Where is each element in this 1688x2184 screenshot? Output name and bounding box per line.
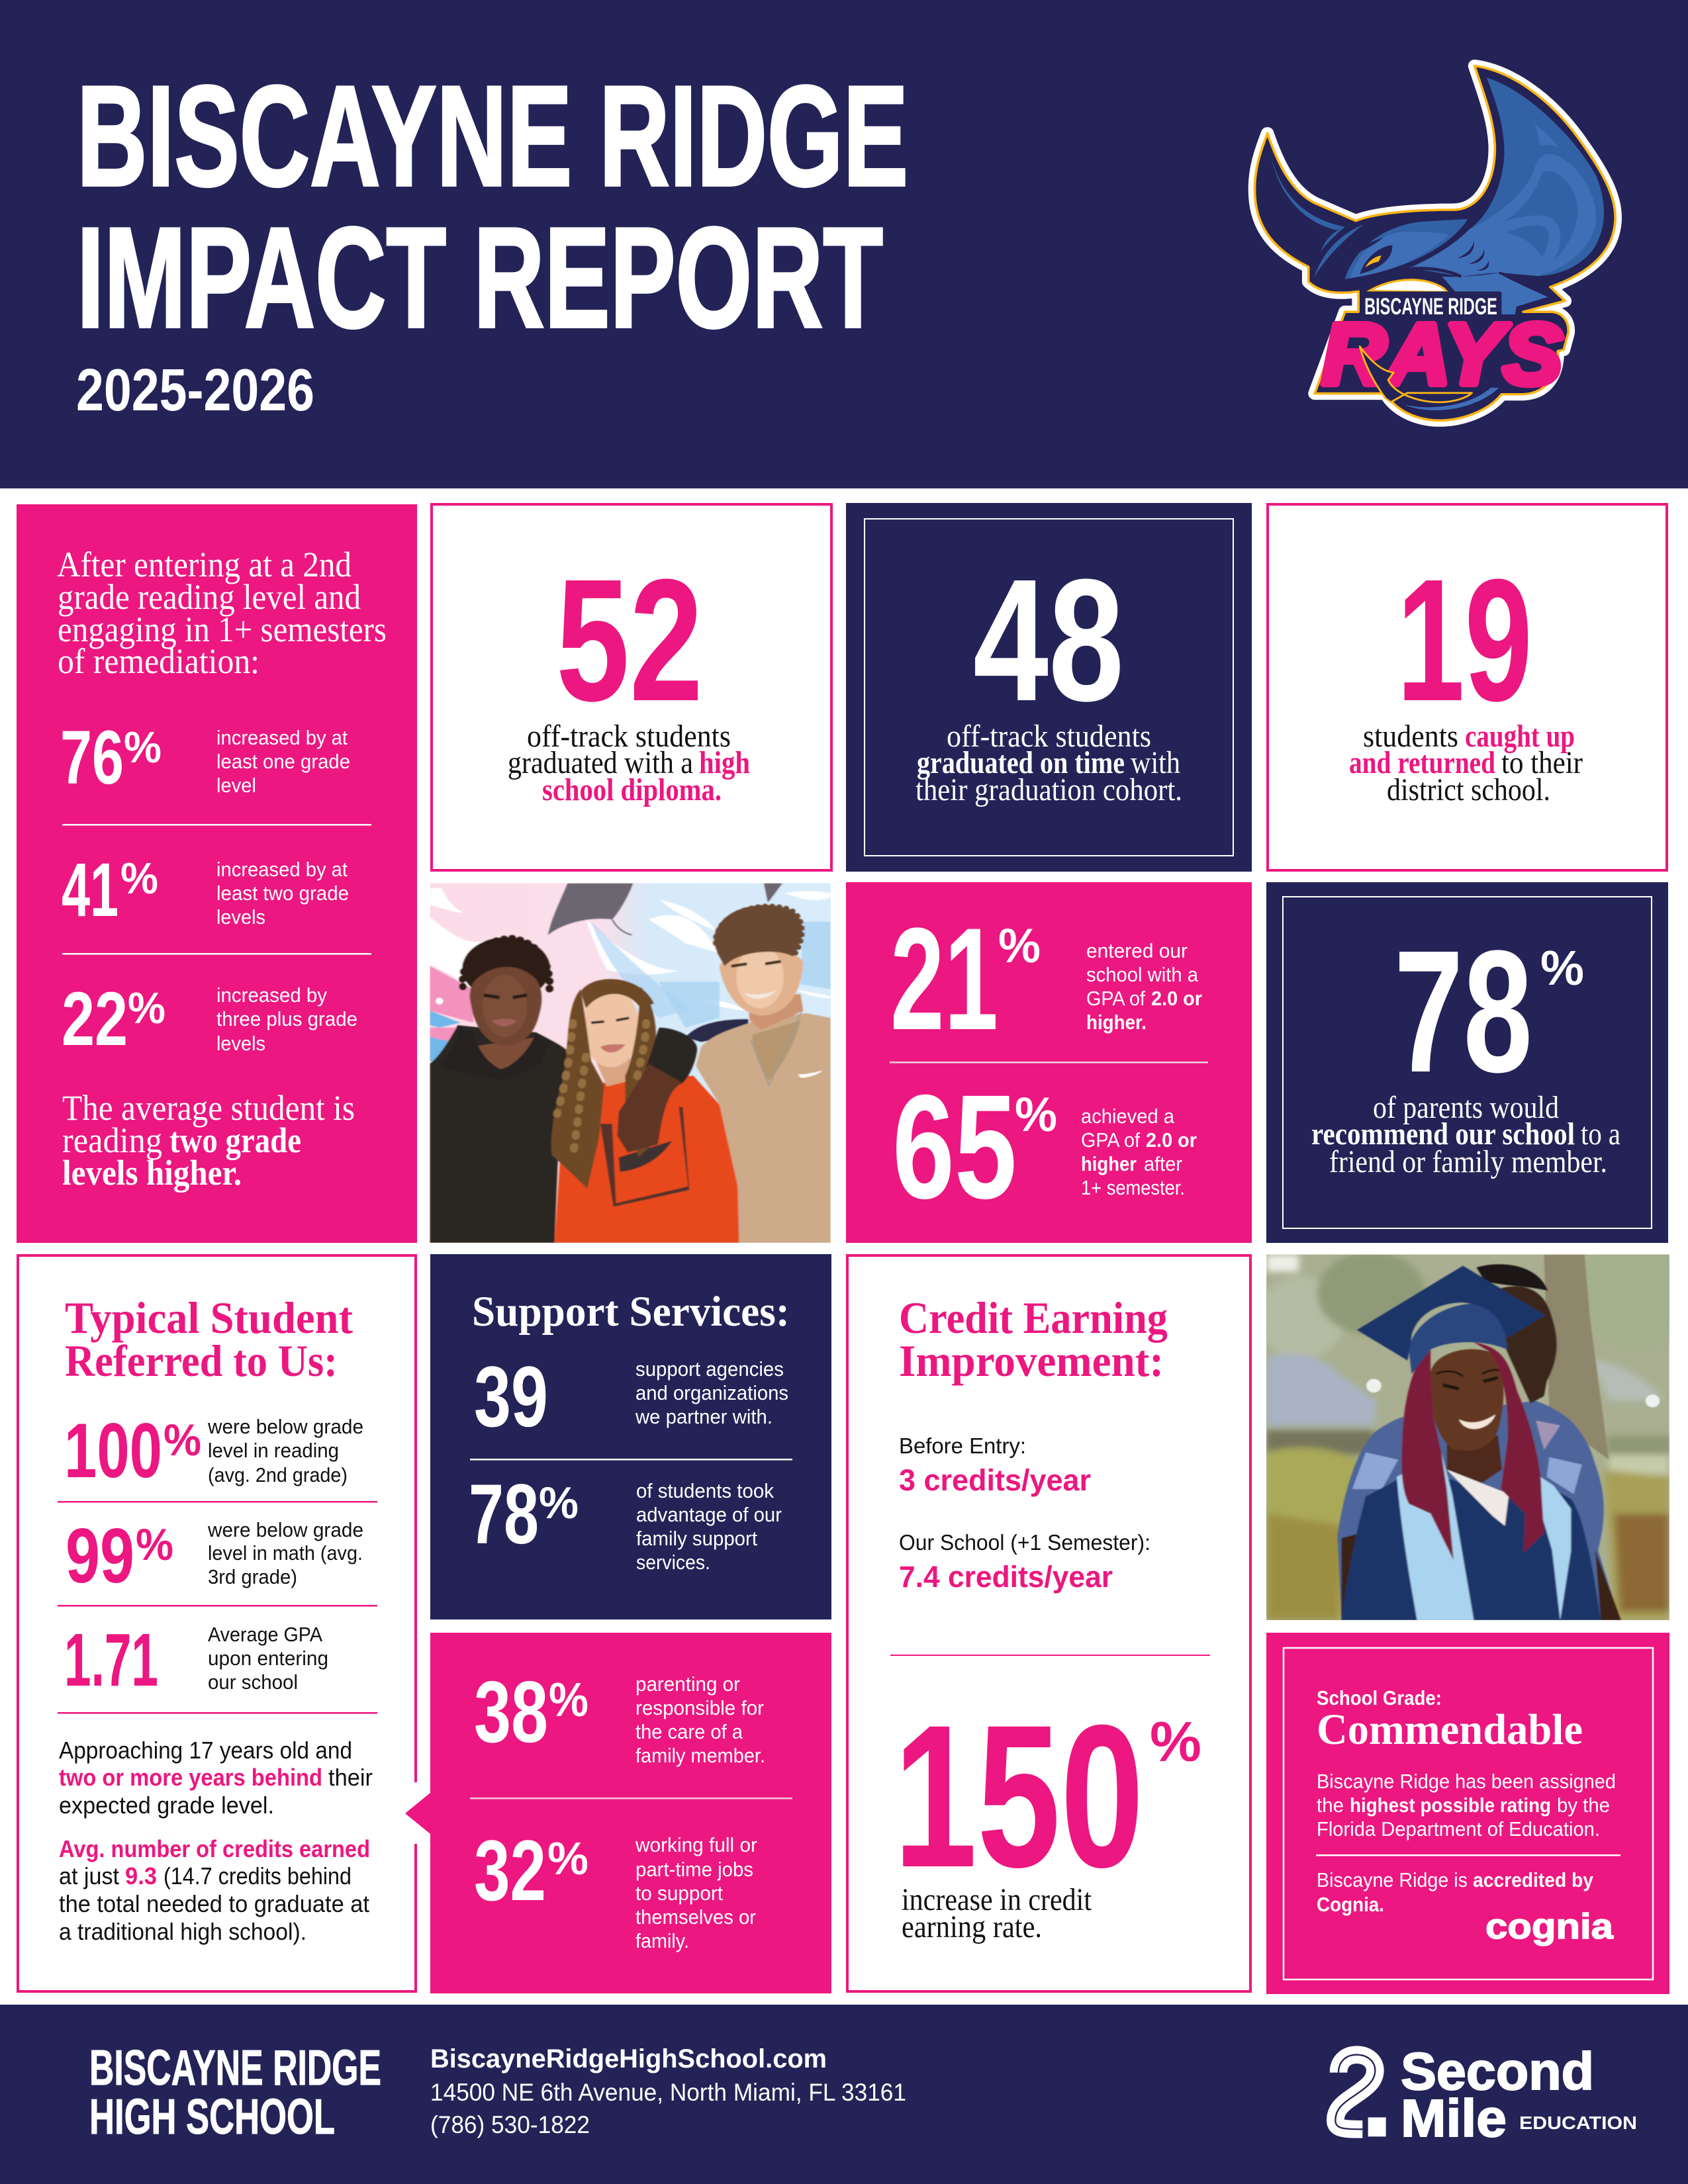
closing text xyxy=(62,1088,355,1193)
stat: 76% xyxy=(60,715,350,800)
school grade: Commendable xyxy=(1317,1706,1583,1754)
number 48: 48 xyxy=(973,543,1124,737)
caption: to a xyxy=(1581,1116,1620,1152)
caption: high xyxy=(699,745,750,780)
caption: graduated with a xyxy=(508,745,693,780)
heading: Referred to Us: xyxy=(65,1336,338,1386)
stat: 78% xyxy=(469,1467,782,1574)
panel: 19 returned xyxy=(1268,504,1667,870)
stat: 38%: the care of a xyxy=(635,1720,743,1743)
panel: school grade commendable xyxy=(1266,1633,1669,1994)
caption xyxy=(508,719,750,807)
stat: 32% xyxy=(474,1822,757,1952)
stat: 99% xyxy=(66,1512,363,1599)
logo: Biscayne Ridge Rays manta: RAYS xyxy=(1322,306,1562,402)
stat: 76%: 76 xyxy=(60,715,124,800)
logo: Second Mile Education: Mile xyxy=(1401,2089,1507,2148)
closing text: The average student is xyxy=(62,1088,355,1128)
girl: hoodie xyxy=(555,1075,739,1243)
stat: 38%: % xyxy=(549,1674,588,1727)
stat: 99%: % xyxy=(136,1520,173,1570)
text: age and grade: Approaching 17 years old and xyxy=(59,1737,352,1764)
boy left: hoodie xyxy=(430,1025,570,1243)
stat: 1.71 GPA: 1.71 xyxy=(64,1618,158,1702)
boy right: tan shirt xyxy=(696,1013,831,1243)
before entry: Before Entry: xyxy=(899,1433,1026,1458)
stat: 78%: family support xyxy=(636,1527,757,1550)
stat: 32%: themselves or xyxy=(635,1905,756,1929)
caption: and returned xyxy=(1349,745,1495,780)
text: age and grade: expected grade level. xyxy=(59,1792,274,1819)
stat: 150%: % xyxy=(1150,1711,1201,1774)
accreditation text: Biscayne Ridge is xyxy=(1317,1868,1468,1891)
man: shirt xyxy=(1337,1401,1620,1620)
stat: 76%: increased by at xyxy=(216,726,348,749)
panel: credit earning improvement xyxy=(847,1255,1250,1991)
panel intro text: grade reading level and xyxy=(58,577,361,617)
photo: three students in front of mural xyxy=(430,884,831,1243)
footer band xyxy=(0,2005,1688,2184)
stat: 100%: were below grade xyxy=(207,1415,363,1438)
text: credits earned xyxy=(59,1835,370,1945)
number 52: 52 xyxy=(556,543,703,737)
stat: 76%: level xyxy=(216,774,256,797)
text: credits earned: the total needed to graduate at xyxy=(59,1890,369,1917)
stat: 21%: entered our xyxy=(1086,939,1188,962)
stat: 41%: 41 xyxy=(62,848,118,933)
stat: 39: and organizations xyxy=(635,1381,788,1404)
heading: Improvement: xyxy=(899,1336,1164,1386)
panel: GPA stats xyxy=(846,882,1252,1243)
stat: 78%: services. xyxy=(636,1551,710,1574)
subtitle: school year: 2025-2026 xyxy=(76,357,314,424)
closing text: levels higher. xyxy=(62,1153,242,1193)
logo: Second Mile Education: EDUCATION xyxy=(1519,2113,1637,2133)
graduate: neck and face xyxy=(1447,1435,1502,1483)
stat: 32%: % xyxy=(547,1833,588,1884)
stat: 21%: GPA of xyxy=(1086,987,1145,1010)
caption: district school. xyxy=(1387,772,1550,807)
before entry xyxy=(899,1433,1091,1497)
caption: off-track students xyxy=(947,719,1151,754)
stat: 78%: of students took xyxy=(636,1479,774,1502)
stat: 65%: 65 xyxy=(892,1064,1017,1230)
panel intro text xyxy=(57,545,387,681)
panel: 48 graduates on time xyxy=(846,503,1252,872)
girl: curly hair xyxy=(551,979,659,1189)
contact details: (786) 530-1822 xyxy=(430,2111,590,2138)
heading xyxy=(65,1293,353,1386)
panel intro text: After entering at a 2nd xyxy=(57,545,352,584)
stat: 22%: levels xyxy=(216,1032,265,1055)
panel intro text: engaging in 1+ semesters xyxy=(58,610,387,649)
cap xyxy=(1409,1304,1507,1374)
stat: 41%: levels xyxy=(216,905,265,929)
caption: caught up xyxy=(1465,719,1575,754)
stat: 32%: family. xyxy=(635,1929,689,1952)
stat: 32%: to support xyxy=(635,1882,723,1905)
school name xyxy=(89,2040,381,2144)
title xyxy=(77,56,908,357)
stat: 99%: were below grade xyxy=(207,1518,363,1541)
stat: 76%: % xyxy=(124,723,162,772)
stat: 65%: 2.0 or xyxy=(1146,1128,1197,1152)
arm over girl xyxy=(646,1028,697,1090)
stat: 22%: % xyxy=(128,983,165,1033)
girl: neck and face xyxy=(594,1056,630,1087)
stat: 65%: GPA of xyxy=(1081,1128,1140,1152)
rating text: the xyxy=(1317,1794,1344,1817)
logo: Biscayne Ridge Rays manta xyxy=(1254,66,1615,420)
header band xyxy=(0,0,1688,488)
stat: 78%: 78 xyxy=(469,1467,539,1562)
stat: 21%: 21 xyxy=(890,897,998,1060)
school name: HIGH SCHOOL xyxy=(89,2089,335,2144)
caption: recommend our school xyxy=(1311,1116,1575,1152)
rating text: highest possible rating xyxy=(1350,1794,1551,1817)
stat: 38% xyxy=(474,1663,765,1767)
number 78%: % xyxy=(1540,940,1584,995)
accreditation text: accredited by xyxy=(1473,1868,1594,1891)
stat: 21% xyxy=(890,897,1202,1060)
caption: increase in credit xyxy=(902,1882,1092,1917)
stat: 65%: 1+ semester. xyxy=(1081,1176,1185,1199)
panel intro text: of remediation: xyxy=(58,641,259,681)
stat: 41%: increased by at xyxy=(216,858,348,881)
closing text: reading xyxy=(62,1120,162,1160)
stat: 99%: 99 xyxy=(66,1512,134,1599)
stat: 32%: 32 xyxy=(474,1822,546,1919)
heading xyxy=(899,1293,1168,1386)
stat: 100%: level in reading xyxy=(208,1439,339,1462)
panel: typical student referred xyxy=(18,1255,420,1991)
text: age and grade: two or more years behind xyxy=(59,1764,322,1791)
caption: earning rate. xyxy=(902,1909,1042,1944)
heading: Credit Earning xyxy=(899,1293,1168,1343)
caption: graduated on time xyxy=(917,745,1125,780)
logo: Second Mile Education xyxy=(1335,2042,1637,2148)
stat: 21%: % xyxy=(998,919,1041,973)
graduate: gown xyxy=(1341,1479,1601,1620)
stat: 100%: 100 xyxy=(64,1407,162,1494)
stat: 32%: working full or xyxy=(635,1833,757,1856)
stat: 99%: level in math (avg. xyxy=(208,1541,363,1565)
our school: Our School (+1 Semester): xyxy=(899,1530,1150,1555)
stat: 41%: % xyxy=(120,854,158,903)
graduate: hair xyxy=(1401,1342,1544,1560)
stat: 78%: advantage of our xyxy=(636,1503,782,1526)
rating text: Florida Department of Education. xyxy=(1317,1817,1600,1841)
stat: 65%: % xyxy=(1015,1088,1057,1142)
stat: 100%: % xyxy=(164,1415,201,1465)
caption xyxy=(915,719,1182,807)
stat: 78%: % xyxy=(539,1478,579,1528)
number 78%: 78 xyxy=(1394,914,1532,1109)
title: BISCAYNE RIDGE xyxy=(77,56,908,216)
school name: BISCAYNE RIDGE xyxy=(89,2040,381,2095)
school grade: School Grade: xyxy=(1317,1686,1442,1709)
rating text: Biscayne Ridge has been assigned xyxy=(1317,1770,1616,1793)
man: head xyxy=(1501,1287,1557,1403)
stat: 150%: 150 xyxy=(894,1683,1144,1910)
contact details: 14500 NE 6th Avenue, North Miami, FL 33161 xyxy=(430,2079,906,2106)
rating text: by the xyxy=(1557,1794,1610,1817)
stat: 32%: part-time jobs xyxy=(635,1858,753,1881)
stat: 1.71 GPA xyxy=(64,1618,328,1702)
panel: 52 graduates xyxy=(432,504,831,870)
text: age and grade xyxy=(59,1737,373,1819)
caption: students xyxy=(1363,719,1458,754)
heading: Support Services: xyxy=(472,1288,790,1336)
text: credits earned: at just xyxy=(59,1862,119,1889)
stat: 41%: least two grade xyxy=(216,882,349,905)
accreditation text: Cognia. xyxy=(1317,1893,1384,1916)
panel: reading growth xyxy=(17,504,417,1243)
stat: 65%: achieved a xyxy=(1081,1105,1175,1128)
caption: friend or family member. xyxy=(1329,1144,1607,1179)
stat: 1.71 GPA: Average GPA xyxy=(208,1623,322,1646)
stat: 1.71 GPA: upon entering xyxy=(208,1647,328,1670)
stat: 65% xyxy=(892,1064,1197,1230)
text: credits earned: (14.7 credits behind xyxy=(164,1862,352,1889)
number 19: 19 xyxy=(1397,543,1532,737)
stat: 22% xyxy=(62,977,357,1062)
before entry: 3 credits/year xyxy=(899,1463,1091,1497)
caption xyxy=(902,1882,1092,1944)
stat: 21%: higher. xyxy=(1086,1011,1147,1034)
our school: 7.4 credits/year xyxy=(899,1560,1113,1594)
stat: 38%: parenting or xyxy=(635,1672,740,1696)
text: credits earned: 9.3 xyxy=(125,1862,157,1889)
graduate: stole xyxy=(1397,1452,1474,1620)
stat: 39: 39 xyxy=(474,1348,548,1445)
panel: family responsibilities with arrow xyxy=(405,1633,831,1993)
stat: 22%: three plus grade xyxy=(216,1007,357,1030)
stat: 38%: family member. xyxy=(635,1744,765,1767)
caption: their graduation cohort. xyxy=(915,772,1182,807)
stat: 100%: (avg. 2nd grade) xyxy=(208,1463,348,1486)
stat: 22%: increased by xyxy=(216,983,327,1007)
stat: 99%: 3rd grade) xyxy=(208,1565,297,1588)
stat: 38%: responsible for xyxy=(635,1696,764,1719)
caption xyxy=(1311,1090,1620,1179)
text: credits earned: Avg. number of credits earned xyxy=(59,1835,370,1862)
title: IMPACT REPORT xyxy=(77,197,883,357)
stat: 38%: 38 xyxy=(474,1663,548,1760)
stat: 39: we partner with. xyxy=(635,1405,773,1428)
our school xyxy=(899,1530,1150,1594)
stat: 100% xyxy=(64,1407,363,1494)
stat: 76%: least one grade xyxy=(216,750,350,773)
text: age and grade: their xyxy=(328,1764,373,1791)
contact details: BiscayneRidgeHighSchool.com xyxy=(430,2044,827,2073)
stat: 65%: after xyxy=(1144,1152,1182,1175)
logo: cognia: cognia xyxy=(1485,1907,1614,1946)
panel: support services xyxy=(430,1254,831,1619)
closing text: two grade xyxy=(169,1120,301,1160)
stat: 39: support agencies xyxy=(635,1357,784,1381)
heading: Typical Student xyxy=(65,1293,353,1343)
panel: 78% of parents xyxy=(1266,882,1668,1243)
text: credits earned: a traditional high school). xyxy=(59,1918,306,1945)
photo: graduate with cap and gown xyxy=(1266,1255,1669,1620)
stat: 22%: 22 xyxy=(62,977,128,1062)
stat: 65%: higher xyxy=(1081,1152,1137,1175)
logo: Biscayne Ridge Rays manta: BISCAYNE RIDGE xyxy=(1364,294,1497,320)
stat: 1.71 GPA: our school xyxy=(208,1670,298,1694)
rating text xyxy=(1317,1770,1616,1841)
logo: Second Mile Education: Second xyxy=(1401,2042,1594,2101)
contact details xyxy=(430,2044,906,2138)
caption: to their xyxy=(1501,745,1583,780)
stat: 39 xyxy=(474,1348,788,1445)
caption xyxy=(1349,719,1583,807)
stat: 21%: 2.0 or xyxy=(1151,987,1202,1010)
stat: 41% xyxy=(62,848,349,933)
caption: of parents would xyxy=(1373,1090,1559,1125)
caption: off-track students xyxy=(527,719,731,754)
caption: school diploma. xyxy=(542,772,722,807)
caption: with xyxy=(1131,745,1180,780)
stat: 21%: school with a xyxy=(1086,963,1199,986)
accreditation text xyxy=(1317,1868,1594,1916)
